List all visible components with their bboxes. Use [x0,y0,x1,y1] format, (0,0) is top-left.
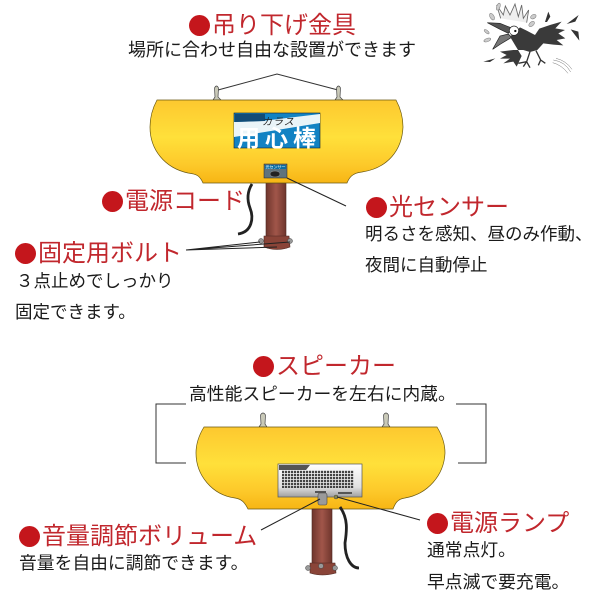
name plate [234,113,321,151]
text: power lamp description: 早点滅で要充電。 [427,572,569,592]
pole bottom [306,509,338,575]
leader lines top [186,178,346,250]
bolt right [335,86,343,100]
heading: volume control: 音量調節ボリューム [42,523,257,550]
volume knob [318,493,327,505]
text: volume description: 音量を自由に調節できます。 [19,553,248,573]
text: power lamp description [427,540,569,592]
power lamp [334,495,338,499]
heading: hanging bracket: 吊り下げ金具 [212,12,356,39]
speaker body top [150,100,403,183]
mounting bracket string [213,74,343,100]
light sensor box [264,164,287,178]
speaker body bottom [196,427,445,509]
heading: light sensor: 光センサー [389,194,509,221]
leader lines bottom [261,497,420,530]
light sensor box: 光センサー [266,164,286,170]
bottom brackets [156,404,486,463]
text: light sensor description: 明るさを感知、昼のみ作動、 [365,224,592,244]
speaker grille panel [278,464,362,497]
bolt left [213,86,221,100]
text: fixing bolt description [15,271,174,322]
text: fixing bolt description: 固定できます。 [15,302,136,322]
heading: fixing bolt: 固定用ボルト [38,240,182,267]
name plate: 用心棒 [237,125,321,151]
power cord top [238,184,252,234]
text: speaker description: 高性能スピーカーを左右に内蔵。 [189,384,456,404]
text: hanging bracket description: 場所に合わせ自由な設置ができます [128,40,416,60]
text: fixing bolt description: ３点止めでしっかり [16,271,174,291]
heading: power cord: 電源コード [125,188,245,215]
name plate: カラス [262,117,295,128]
bolts bottom [259,413,390,427]
text: light sensor description [365,224,592,275]
text: light sensor description: 夜間に自動停止 [365,255,488,275]
pole top [258,183,292,250]
heading: power lamp: 電源ランプ [450,510,569,537]
power cord bottom [340,507,359,568]
icon: startled crow [483,3,579,73]
text: power lamp description: 通常点灯。 [427,540,516,560]
heading: speaker: スピーカー [276,353,396,380]
